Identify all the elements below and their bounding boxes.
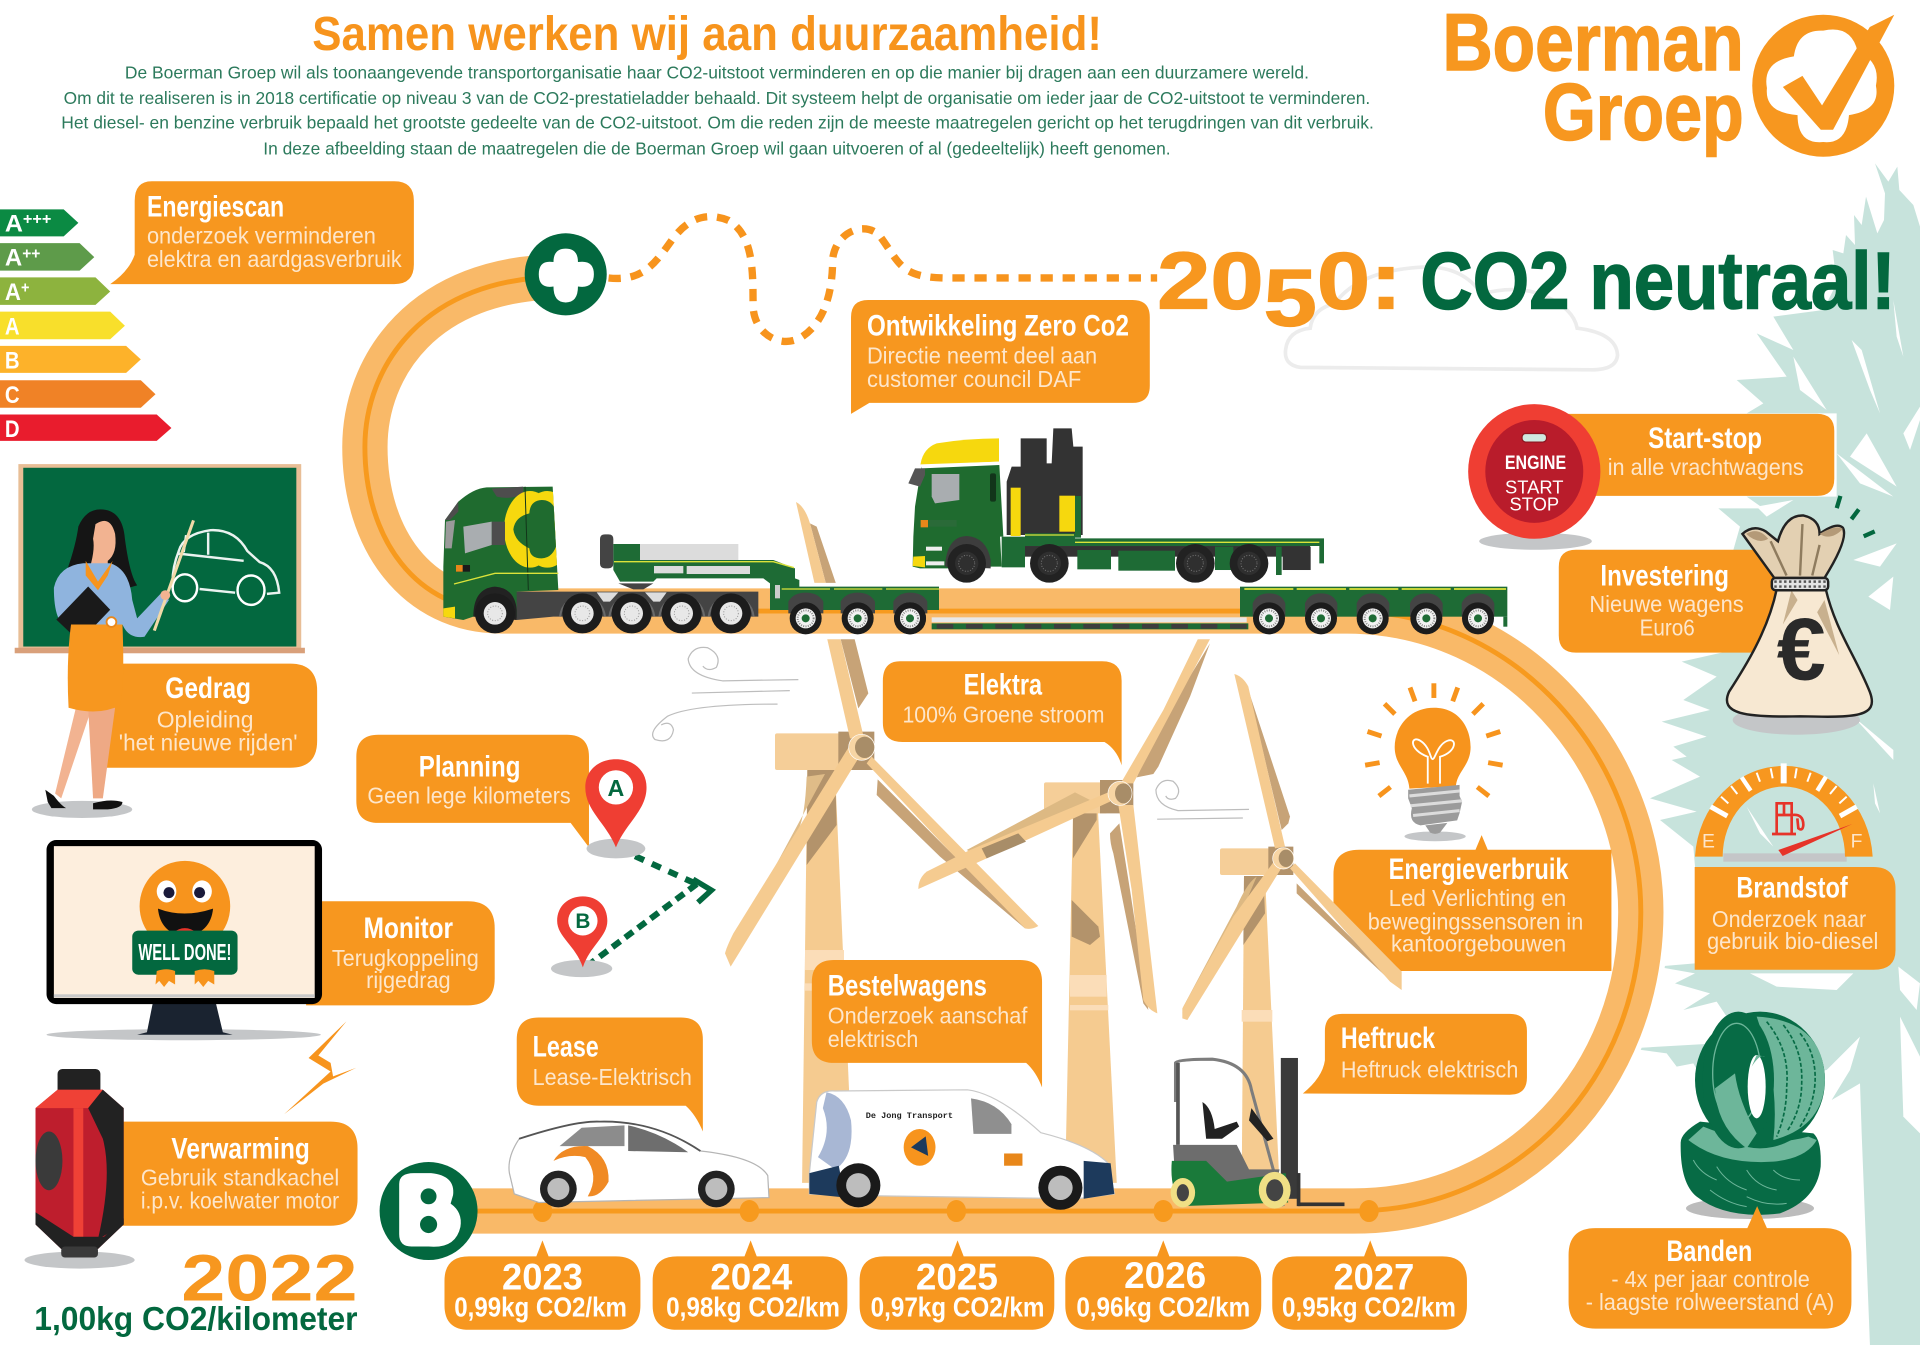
icon: light bulb: [1365, 683, 1503, 841]
panel: Ontwikkeling Zero Co2: [851, 300, 1150, 414]
icon: tyres: [1681, 1012, 1825, 1219]
milestone 2024: 0,98kg CO2/km: [666, 1291, 840, 1322]
energy label scale: +: [21, 280, 29, 297]
chalkboard with car: [15, 464, 305, 653]
milestone 2026: 0,96kg CO2/km: [1076, 1291, 1250, 1322]
panel: Energieverbruik: Led Verlichting en: [1389, 885, 1566, 911]
milestone 2023: 2023: [502, 1256, 583, 1297]
panel: Gedrag: 'het nieuwe rijden': [119, 730, 298, 756]
panel: Energiescan: Energiescan: [147, 191, 284, 224]
headline: 2050: 20: [1157, 237, 1247, 327]
panel: Energieverbruik: [1333, 835, 1611, 971]
energy label scale: [0, 209, 171, 443]
panel: Ontwikkeling Zero Co2: customer council DAF: [867, 366, 1081, 392]
panel: Start-stop: Start-stop: [1648, 422, 1762, 455]
icon: money bag: [1727, 496, 1875, 735]
end marker B circle: [380, 1162, 478, 1260]
panel: Verwarming: [116, 1122, 358, 1226]
panel: Planning: [356, 735, 589, 847]
milestone 2025: [860, 1240, 1054, 1330]
illustration: delivery van: De Jong Transport: [866, 1111, 953, 1121]
low loader rear deck and trailer: [894, 587, 1507, 634]
milestone 2023: [444, 1240, 640, 1330]
panel: Verwarming: Gebruik standkachel: [141, 1164, 339, 1190]
energy label scale: B: [5, 348, 20, 375]
milestone 2024: [653, 1240, 847, 1330]
panel: Heftruck: Heftruck: [1341, 1022, 1436, 1055]
icon: engine start stop button: START: [1505, 476, 1564, 497]
panel: Energiescan: [110, 181, 414, 284]
panel: Gedrag: Opleiding: [157, 706, 253, 732]
road: [365, 277, 1641, 1211]
illustration: parking heater: [24, 1069, 135, 1269]
energy label scale: C: [5, 382, 20, 409]
route A to B arrow: [585, 849, 711, 967]
panel: Gedrag: Gedrag: [165, 672, 251, 705]
milestone 2023: 0,99kg CO2/km: [454, 1291, 627, 1322]
energy label scale: ++: [22, 245, 40, 262]
panel: Verwarming: Verwarming: [171, 1132, 310, 1165]
milestone 2025: 2025: [916, 1256, 998, 1297]
milestone 2027: 2027: [1333, 1256, 1414, 1297]
icon: engine start stop button: ENGINE: [1505, 452, 1566, 474]
illustration: delivery van: [809, 1090, 1114, 1210]
energy label scale: D: [5, 416, 20, 443]
panel: Planning: Planning: [419, 750, 520, 783]
panel: Planning: Geen lege kilometers: [367, 782, 571, 808]
icon: engine start stop button: [1468, 404, 1600, 550]
truck 2: flatbed with crane: [908, 428, 1324, 583]
panel: Lease: Lease: [533, 1031, 599, 1064]
title: Samen werken wij aan duurzaamheid!: [312, 8, 1102, 61]
illustration: computer monitor with well done smiley: [47, 840, 322, 1040]
icon: money bag: €: [1777, 600, 1826, 699]
milestone 2024: 2024: [710, 1256, 793, 1297]
energy label scale: A: [5, 313, 20, 340]
energy label scale: A: [5, 210, 23, 237]
illustration: teacher: [32, 509, 193, 818]
panel: Monitor: rijgedrag: [366, 967, 451, 993]
icon: fuel gauge: [1695, 763, 1873, 862]
panel: Start-stop: [1555, 414, 1834, 496]
panel: Elektra: [883, 661, 1122, 765]
truck 1: low loader: [443, 487, 939, 634]
panel: Investering: Nieuwe wagens: [1589, 591, 1744, 617]
panel: Investering: Euro6: [1640, 615, 1695, 641]
panel: Energieverbruik: bewegingssensoren in: [1368, 908, 1583, 934]
baseline 2022: 1,00kg CO2/kilometer: [34, 1301, 358, 1338]
intro text: In deze afbeelding staan de maatregelen die de Boerman Groep wil gaan uitvoeren of al (gedeeltelijk) heeft genomen.: [263, 138, 1171, 158]
illustration: electric lease car: [509, 1122, 769, 1207]
start marker circle: [525, 233, 607, 315]
panel: Banden: - laagste rolweerstand (A): [1586, 1289, 1834, 1315]
milestone 2027: [1272, 1240, 1467, 1330]
logo: Boerman Groep: Groep: [1543, 68, 1744, 158]
panel: Verwarming: i.p.v. koelwater motor: [141, 1188, 340, 1214]
panel: Banden: Banden: [1667, 1235, 1752, 1268]
panel: Bestelwagens: elektrisch: [828, 1026, 918, 1052]
energy label scale: A: [5, 279, 23, 306]
panel: Bestelwagens: [812, 960, 1042, 1087]
wind turbine 3: [1182, 674, 1293, 1188]
panel: Monitor: Terugkoppeling: [332, 945, 479, 971]
panel: Gedrag: [104, 664, 317, 768]
panel: Brandstof: [1695, 867, 1896, 970]
panel: Banden: - 4x per jaar controle: [1611, 1266, 1810, 1292]
road milestones: [533, 1200, 1379, 1222]
panel: Monitor: Monitor: [364, 912, 453, 945]
baseline 2022: [34, 1241, 358, 1338]
icon: pin B: [551, 896, 612, 977]
panel: Elektra: Elektra: [964, 668, 1043, 701]
background tree: [1630, 163, 1920, 1345]
logo: Boerman Groep: Boerman: [1442, 0, 1744, 88]
intro text: De Boerman Groep wil als toonaangevende transportorganisatie haar CO2-uitstoot verminderen en op die manier bij dragen aan een duurzamere wereld.: [125, 62, 1309, 82]
cloud behind 2050 headline: [1285, 267, 1618, 370]
icon: fuel gauge: E: [1702, 831, 1715, 852]
panel: Banden: [1569, 1206, 1851, 1329]
milestone 2026: 2026: [1124, 1255, 1206, 1296]
panel: Energiescan: elektra en aardgasverbruik: [147, 246, 402, 272]
panel: Bestelwagens: Onderzoek aanschaf: [828, 1003, 1028, 1029]
icon: lightning: [284, 1021, 356, 1114]
baseline 2022: 2022: [181, 1241, 358, 1315]
icon: pin A: A: [608, 775, 625, 801]
panel: Ontwikkeling Zero Co2: Directie neemt deel aan: [867, 343, 1097, 369]
panel: Elektra: 100% Groene stroom: [902, 701, 1104, 727]
panel: Brandstof: Onderzoek naar: [1712, 906, 1867, 932]
panel: Lease: [517, 1018, 703, 1131]
intro text: Het diesel- en benzine verbruik bepaald het grootste gedeelte van de CO2-uitstoot. Om die reden zijn de meeste maatregelen gericht op het terugdringen van dit verbruik.: [61, 113, 1374, 133]
panel: Brandstof: Brandstof: [1736, 872, 1848, 905]
dashed route to 2050: [609, 217, 1157, 341]
wind turbine 2: [918, 636, 1212, 1188]
milestone 2025: 0,97kg CO2/km: [871, 1291, 1044, 1322]
illustration: electric forklift: [1171, 1058, 1344, 1209]
panel: Heftruck: Heftruck elektrisch: [1341, 1057, 1518, 1083]
icon: pin B: B: [575, 910, 590, 933]
panel: Start-stop: in alle vrachtwagens: [1608, 454, 1804, 480]
headline: 2050: 5: [1264, 254, 1317, 344]
wind turbine 1: [725, 502, 1038, 1188]
intro text: [61, 62, 1374, 158]
icon: engine start stop button: STOP: [1509, 494, 1559, 515]
panel: Investering: [1559, 550, 1776, 653]
wind swirls: [653, 647, 1249, 819]
milestone 2026: [1065, 1240, 1261, 1330]
milestone 2027: 0,95kg CO2/km: [1282, 1291, 1456, 1322]
panel: Energieverbruik: kantoorgebouwen: [1391, 930, 1566, 956]
panel: Heftruck: [1303, 1014, 1527, 1095]
energy label scale: +++: [23, 211, 51, 228]
panel: Lease: Lease-Elektrisch: [533, 1064, 692, 1090]
panel: Monitor: [306, 901, 495, 1005]
panel: Energiescan: onderzoek verminderen: [147, 223, 376, 249]
turbine 3 lower right blade: [1273, 848, 1402, 990]
icon: pin A: [585, 759, 647, 858]
icon: fuel gauge: F: [1851, 831, 1863, 852]
panel: Energieverbruik: Energieverbruik: [1389, 853, 1569, 886]
panel: Ontwikkeling Zero Co2: Ontwikkeling Zero Co2: [867, 310, 1129, 343]
intro text: Om dit te realiseren is in 2018 certificatie op niveau 3 van de CO2-prestatieladder behaald. Dit systeem helpt de organisatie om ieder jaar de CO2-uitstoot te verminderen.: [64, 88, 1370, 108]
panel: Investering: Investering: [1600, 559, 1729, 592]
logo: Boerman Groep: [1442, 0, 1894, 158]
headline: 2050: 0:: [1317, 237, 1402, 327]
energy label scale: A: [5, 245, 23, 272]
illustration: computer monitor with well done smiley: WELL DONE!: [138, 939, 231, 965]
panel: Bestelwagens: Bestelwagens: [828, 970, 987, 1003]
panel: Brandstof: gebruik bio-diesel: [1707, 928, 1878, 954]
